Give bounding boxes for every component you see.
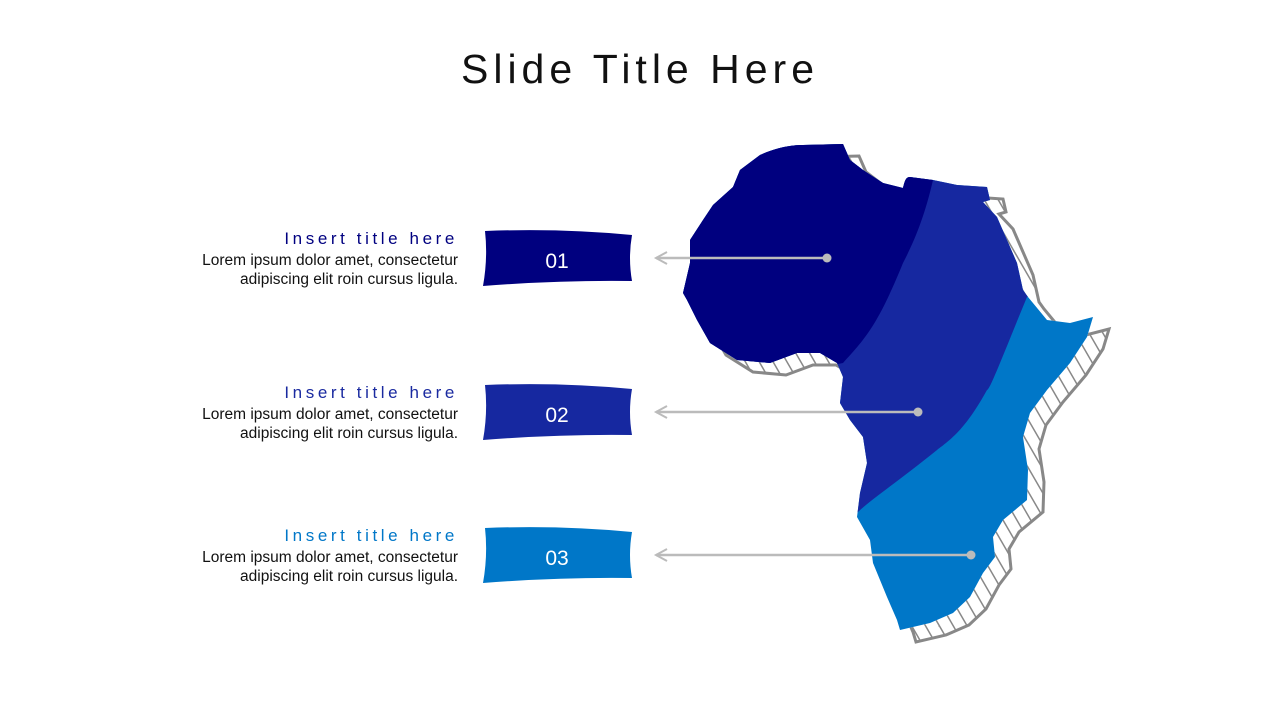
connector 3 — [656, 549, 976, 561]
text block 2: Insert title here — [284, 383, 458, 402]
number box 01 — [483, 230, 632, 286]
map of Africa — [683, 144, 1093, 630]
text block 1: adipiscing elit roin cursus ligula. — [240, 271, 458, 288]
number box 03 — [483, 527, 632, 583]
number box 02 — [483, 384, 632, 440]
text block 2: adipiscing elit roin cursus ligula. — [240, 425, 458, 442]
text block 3: Lorem ipsum dolor amet, consectetur — [202, 549, 458, 566]
text block 3: adipiscing elit roin cursus ligula. — [240, 568, 458, 585]
map hatch shadow — [699, 156, 1109, 642]
number box 01: 01 — [545, 250, 569, 273]
text block 1: Insert title here — [284, 229, 458, 248]
title: Slide Title Here — [461, 46, 819, 92]
region 3 — [683, 144, 1093, 630]
text block 3: Insert title here — [284, 526, 458, 545]
number box 02: 02 — [545, 404, 569, 427]
graphic — [483, 144, 1112, 644]
text block 1 — [202, 229, 458, 288]
text block 2 — [202, 383, 458, 442]
text block 2: Lorem ipsum dolor amet, consectetur — [202, 406, 458, 423]
text block 3 — [202, 526, 458, 585]
connector 1 — [656, 252, 832, 264]
region 1 — [683, 144, 933, 364]
number box 03: 03 — [545, 547, 569, 570]
text block 1: Lorem ipsum dolor amet, consectetur — [202, 252, 458, 269]
region 2 — [683, 144, 1028, 512]
connector 2 — [656, 406, 922, 418]
